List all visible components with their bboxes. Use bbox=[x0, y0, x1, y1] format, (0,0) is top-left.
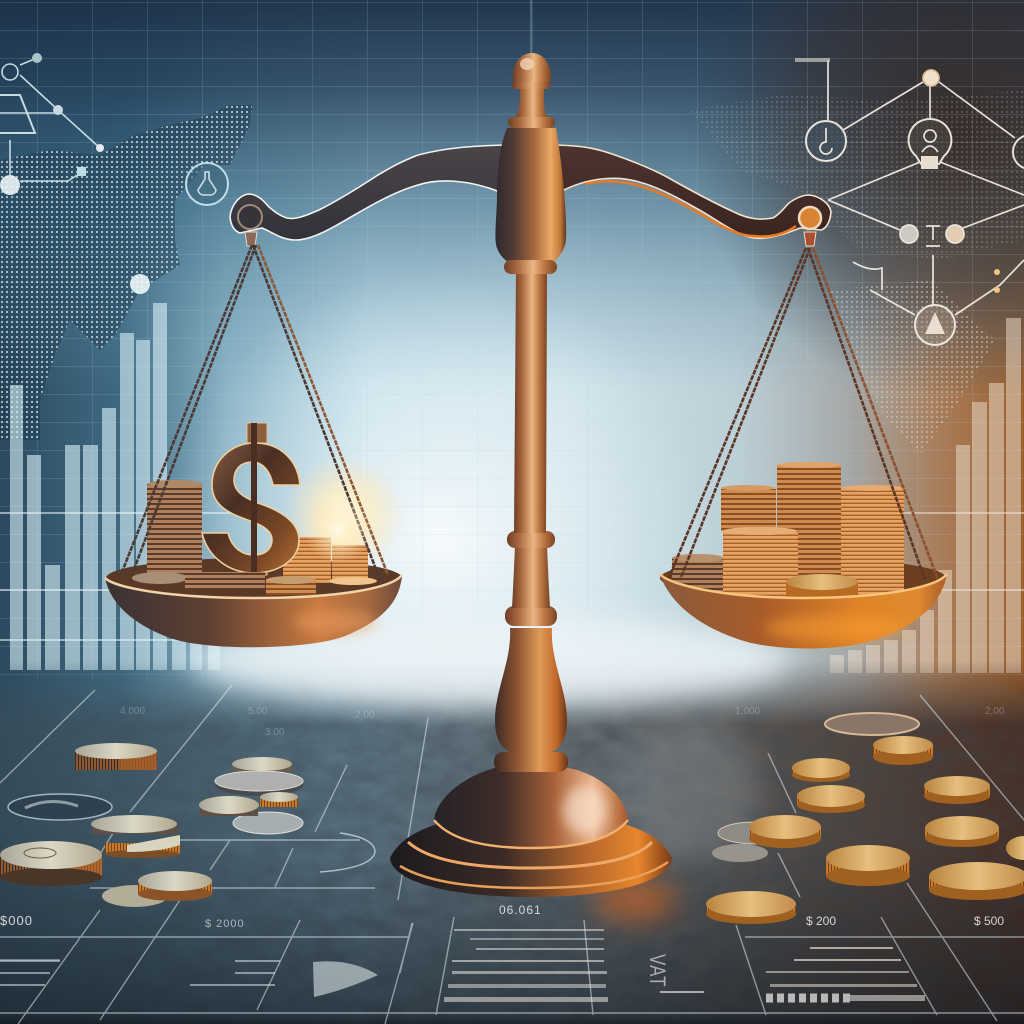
faint floor notes: 5.00 bbox=[248, 706, 268, 717]
floor labels: $000 bbox=[0, 913, 33, 928]
scale central hub bbox=[495, 53, 566, 274]
light flare: left pan bbox=[304, 496, 372, 564]
scale beam bbox=[230, 145, 831, 246]
floor bbox=[0, 660, 1024, 1024]
coin bbox=[925, 816, 999, 847]
orange floor reflection bbox=[593, 878, 677, 922]
network icons: left bbox=[0, 53, 228, 294]
left pan bbox=[105, 245, 405, 647]
coin bbox=[260, 792, 298, 807]
glow behind dollar bbox=[285, 455, 405, 575]
coin stacks: behind dollar bbox=[283, 537, 368, 583]
VAT label bbox=[644, 954, 704, 993]
scale column bbox=[494, 270, 568, 772]
coin bbox=[797, 785, 865, 813]
floor labels: $ 500 bbox=[974, 914, 1004, 928]
coin bbox=[718, 822, 792, 844]
coin bbox=[826, 845, 910, 886]
faint floor notes: 3.00 bbox=[265, 727, 285, 738]
right pan bbox=[660, 248, 947, 648]
bar chart: right bbox=[830, 318, 1024, 673]
chart line: floor curve bbox=[320, 833, 375, 872]
faint floor notes: 1,000 bbox=[735, 706, 760, 717]
floor labels bbox=[0, 903, 1004, 930]
coins in pan bbox=[132, 572, 377, 595]
back of right pan bbox=[660, 558, 946, 598]
coin bbox=[749, 815, 821, 848]
floor chart grid lines bbox=[0, 685, 1024, 1024]
world map dots: right bbox=[690, 90, 1024, 455]
coin bbox=[712, 844, 768, 862]
coin bbox=[873, 736, 933, 765]
VAT label: VAT bbox=[644, 954, 669, 988]
faint floor notes: 4.000 bbox=[120, 706, 145, 717]
coin bbox=[232, 757, 292, 771]
dollar sign icon bbox=[202, 423, 300, 583]
table rows: right bbox=[766, 947, 925, 998]
coin bbox=[706, 891, 796, 924]
floor labels: 06.061 bbox=[499, 903, 542, 917]
fog glow above floor bbox=[190, 615, 790, 860]
coin bbox=[215, 771, 303, 796]
pie wedge icon bbox=[313, 961, 378, 997]
coin bbox=[1006, 836, 1024, 860]
floor labels: $ 200 bbox=[806, 914, 836, 928]
coin stack: left tall bbox=[147, 480, 202, 576]
scale chains: right bbox=[668, 248, 940, 585]
floor labels: $ 2000 bbox=[205, 918, 245, 930]
faint floor notes: 2,00 bbox=[355, 710, 375, 721]
coin bbox=[233, 812, 303, 834]
background: gradient backdrop bbox=[0, 0, 1024, 750]
bar chart: left bbox=[0, 303, 240, 670]
right pan bowl bbox=[660, 574, 947, 648]
coin bbox=[75, 743, 157, 770]
coin bbox=[924, 776, 990, 804]
glass disc bbox=[8, 794, 112, 820]
network icons: right bbox=[795, 60, 1024, 345]
coin bbox=[0, 841, 102, 886]
scale base bbox=[390, 767, 672, 897]
coin bbox=[792, 758, 850, 782]
faint floor notes: 2,00 bbox=[985, 706, 1005, 717]
coins on floor: left bbox=[0, 743, 303, 907]
world map dots: left bbox=[0, 105, 252, 440]
scale bbox=[230, 53, 831, 897]
left pan bowl bbox=[105, 575, 402, 647]
coin bbox=[91, 815, 178, 834]
coin stacks: right pan bbox=[672, 462, 904, 598]
faint floor notes bbox=[120, 706, 1005, 738]
coin bbox=[104, 835, 180, 858]
coin bbox=[199, 796, 259, 816]
scale chains: left bbox=[120, 245, 388, 580]
coin bbox=[138, 871, 212, 901]
table rows: center bbox=[444, 929, 608, 1002]
back of left pan bbox=[106, 558, 402, 598]
coin bbox=[102, 885, 168, 907]
coin bbox=[929, 862, 1024, 900]
coins on floor: right bbox=[706, 713, 1024, 924]
table rows: left bbox=[0, 960, 280, 986]
